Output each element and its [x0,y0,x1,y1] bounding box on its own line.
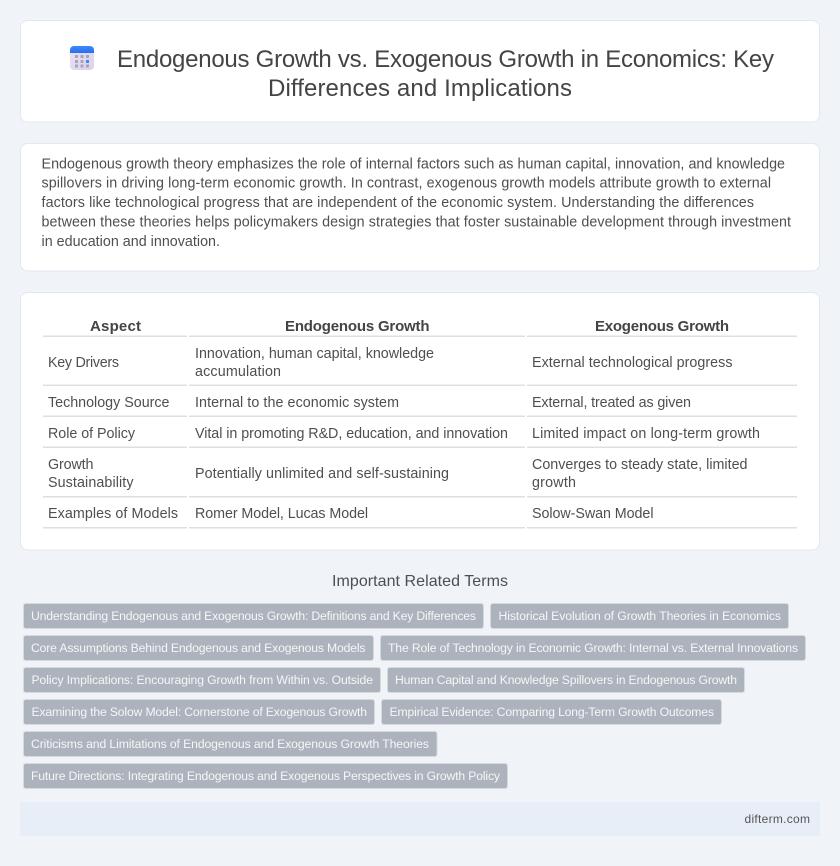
row: technology source: Internal to the economic system [195,395,399,411]
row: technology source [48,395,691,411]
tag [24,636,374,660]
row: examples of models: Solow-Swan Model [532,506,654,522]
table header: Aspect [90,318,141,335]
tag: Historical Evolution of Growth Theories in Economics [498,609,781,623]
row: key drivers: accumulation [195,364,281,380]
intro text: spillovers in driving long-term economic growth. In contrast, exogenous growth models attribute growth to external [42,176,771,192]
table header: Exogenous Growth [595,318,729,335]
row: key drivers: External technological progress [532,355,732,371]
intro text: between these theories helps policymakers design strategies that foster sustainable development through investment [42,214,791,230]
tag [24,764,508,788]
intro text: factors like technological progress that are independent of the economic system. Understanding the differences [42,195,754,211]
tag [382,700,722,724]
tag: The Role of Technology in Economic Growth: Internal vs. External Innovations [388,641,798,655]
tag: Policy Implications: Encouraging Growth from Within vs. Outside [32,673,373,687]
row: role of policy [48,426,760,442]
row: key drivers: Innovation, human capital, knowledge [195,346,434,362]
footer [20,802,820,836]
tag [24,732,437,756]
tag: Criticisms and Limitations of Endogenous and Exogenous Growth Theories [31,737,429,751]
row: key drivers [48,346,732,380]
panel: intro paragraph [20,144,820,271]
row: role of policy: Role of Policy [48,426,136,442]
title [117,46,774,102]
tag [380,636,806,660]
tag [388,668,744,692]
table header [90,318,729,335]
row: role of policy: Vital in promoting R&D, education, and innovation [195,426,508,442]
row: growth sustainability [48,457,748,491]
row: examples of models: Romer Model, Lucas Model [195,506,368,522]
row: growth sustainability: Converges to steady state, limited [532,457,748,473]
row: examples of models [48,506,654,522]
tag: Future Directions: Integrating Endogenous and Exogenous Perspectives in Growth Policy [31,769,501,783]
tag [490,604,788,628]
tag: Human Capital and Knowledge Spillovers in Endogenous Growth [395,673,737,687]
row: growth sustainability: Potentially unlimited and self-sustaining [195,466,449,482]
row: growth sustainability: Growth [48,457,94,473]
tag [24,700,374,724]
row: technology source: External, treated as given [532,395,691,411]
row: role of policy: Limited impact on long-term growth [532,426,760,442]
related terms tags [24,604,806,788]
footer site name: difterm.com [744,812,810,826]
tag: Empirical Evidence: Comparing Long-Term Growth Outcomes [390,705,714,719]
row: technology source: Technology Source [48,395,170,411]
row: key drivers: Key Drivers [48,355,119,371]
row: examples of models: Examples of Models [48,506,178,522]
panel: title header [20,20,820,122]
panel: comparison table [20,292,820,550]
intro text: Endogenous growth theory emphasizes the role of internal factors such as human capital, innovation, and knowledge [42,156,785,172]
table header: Endogenous Growth [285,318,430,335]
row: growth sustainability: Sustainability [48,475,134,491]
tag [24,668,380,692]
intro text [42,156,791,250]
tag: Core Assumptions Behind Endogenous and Exogenous Models [31,641,366,655]
icon: calendar [70,46,94,70]
intro text: in education and innovation. [42,234,220,250]
tag: Examining the Solow Model: Cornerstone of Exogenous Growth [32,705,367,719]
title: Endogenous Growth vs. Exogenous Growth in Economics: Key [117,46,774,73]
tag [24,604,484,628]
tag: Understanding Endogenous and Exogenous Growth: Definitions and Key Differences [31,609,476,623]
title: Differences and Implications [268,75,572,102]
row: growth sustainability: growth [532,475,576,491]
heading: important related terms: Important Related Terms [332,573,508,590]
